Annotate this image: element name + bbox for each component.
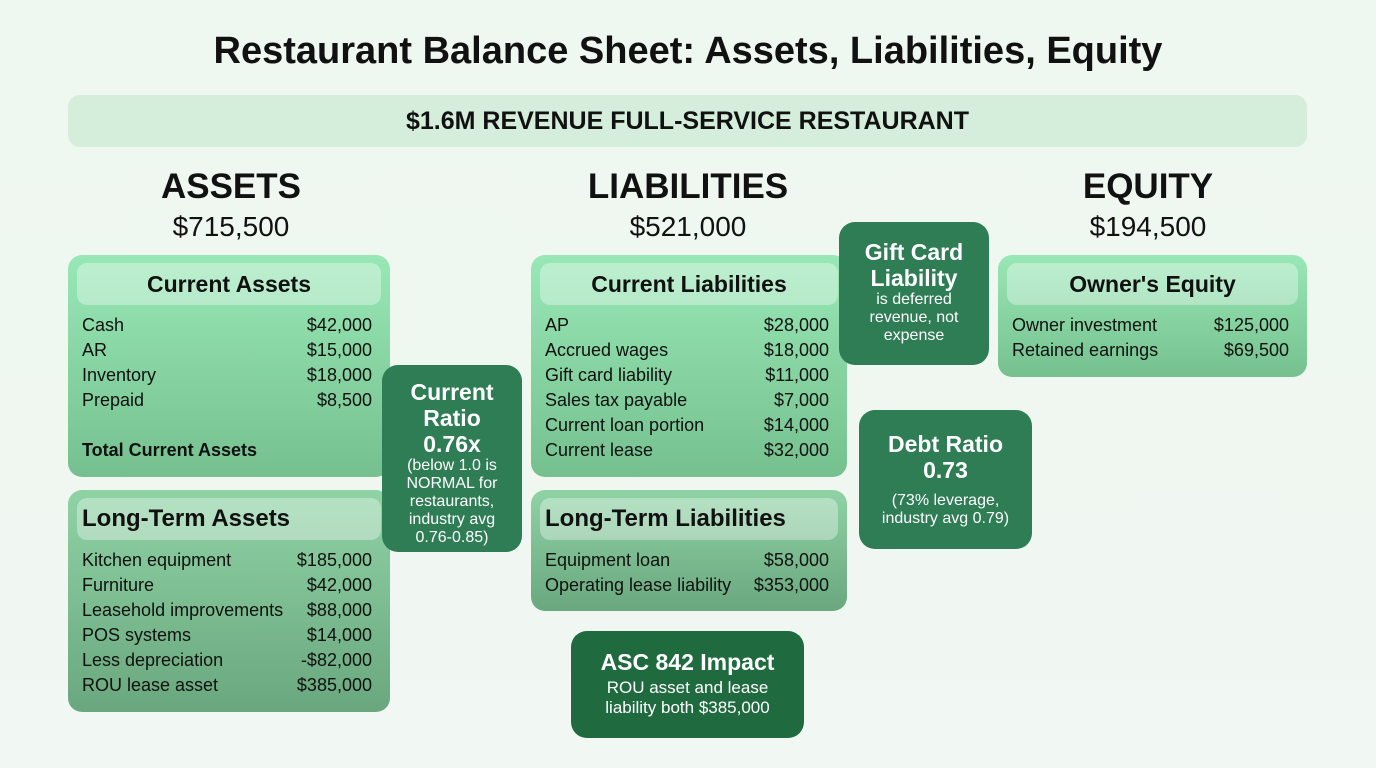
panel: long-term assets: $88,000 <box>307 600 372 620</box>
panel: long-term assets: $42,000 <box>307 575 372 595</box>
panel: owner's equity: Owner investment <box>1012 315 1157 335</box>
callout: ASC 842: ASC 842 Impact <box>601 649 774 675</box>
panel: current assets: Inventory <box>82 365 156 385</box>
panel: long-term assets: Long-Term Assets <box>82 505 290 532</box>
panel: current liabilities: Accrued wages <box>545 340 668 360</box>
panel: current liabilities: Sales tax payable <box>545 390 687 410</box>
panel: current liabilities: $32,000 <box>764 440 829 460</box>
panel: current assets: $8,500 <box>317 390 372 410</box>
panel: long-term assets: $185,000 <box>297 550 372 570</box>
callout: debt ratio <box>859 410 1032 549</box>
panel: current liabilities: Current loan portion <box>545 415 704 435</box>
callout: ASC 842: liability both $385,000 <box>605 698 770 717</box>
panel: current assets: Current Assets <box>147 271 311 297</box>
panel: long-term liabilities: Long-Term Liabilities <box>545 505 786 532</box>
callout: current ratio: (below 1.0 is <box>407 457 497 474</box>
callout: gift card liability: is deferred <box>876 291 952 308</box>
panel: long-term liabilities <box>531 490 847 611</box>
heading: liabilities: LIABILITIES <box>588 167 788 206</box>
panel: owner's equity: Retained earnings <box>1012 340 1158 360</box>
heading: equity: $194,500 <box>1090 211 1206 242</box>
panel: current assets: Prepaid <box>82 390 144 410</box>
callout: current ratio: restaurants, <box>410 493 494 510</box>
panel: current liabilities: Current Liabilities <box>591 271 787 297</box>
callout: gift card liability <box>839 222 989 365</box>
panel: long-term assets: $14,000 <box>307 625 372 645</box>
panel: owner's equity: $69,500 <box>1224 340 1289 360</box>
heading: assets: ASSETS <box>161 167 301 206</box>
title: Restaurant Balance Sheet: Assets, Liabilities, Equity <box>214 30 1162 72</box>
callout: current ratio <box>382 365 522 552</box>
callout: debt ratio: (73% leverage, <box>892 492 999 509</box>
heading: assets <box>161 167 301 242</box>
panel: current liabilities <box>531 255 847 477</box>
heading: liabilities: $521,000 <box>630 211 746 242</box>
panel: current assets: $15,000 <box>307 340 372 360</box>
panel: current liabilities: Gift card liability <box>545 365 672 385</box>
panel: long-term assets: ROU lease asset <box>82 675 218 695</box>
panel: current liabilities: $7,000 <box>774 390 829 410</box>
panel: long-term assets <box>68 490 390 712</box>
panel: current liabilities: $11,000 <box>765 365 829 385</box>
panel: current assets: Cash <box>82 315 124 335</box>
panel: long-term liabilities: $58,000 <box>764 550 829 570</box>
heading: equity <box>1083 167 1213 242</box>
callout: ASC 842: ROU asset and lease <box>607 678 768 697</box>
panel: long-term assets: -$82,000 <box>301 650 372 670</box>
panel: long-term liabilities: Equipment loan <box>545 550 670 570</box>
banner <box>68 95 1307 147</box>
callout: current ratio: Ratio <box>423 405 481 431</box>
panel: long-term assets: Furniture <box>82 575 154 595</box>
panel: current assets: $42,000 <box>307 315 372 335</box>
panel: current liabilities: $18,000 <box>764 340 829 360</box>
panel: current assets <box>68 255 390 477</box>
panel: long-term liabilities: $353,000 <box>754 575 829 595</box>
panel: current liabilities: AP <box>545 315 569 335</box>
panel: long-term assets: Kitchen equipment <box>82 550 231 570</box>
banner: $1.6M REVENUE FULL-SERVICE RESTAURANT <box>406 107 969 135</box>
panel: owner's equity: Owner's Equity <box>1069 271 1236 297</box>
panel: long-term assets: POS systems <box>82 625 191 645</box>
panel: current liabilities: $28,000 <box>764 315 829 335</box>
heading: assets: $715,500 <box>173 211 289 242</box>
callout: current ratio: industry avg <box>409 511 495 528</box>
callout: gift card liability: Liability <box>871 265 957 291</box>
panel: long-term assets: $385,000 <box>297 675 372 695</box>
callout: current ratio: NORMAL for <box>406 475 497 492</box>
heading: equity: EQUITY <box>1083 167 1213 206</box>
panel: owner's equity: $125,000 <box>1214 315 1289 335</box>
callout: gift card liability: Gift Card <box>865 239 963 265</box>
panel: long-term assets: Leasehold improvements <box>82 600 283 620</box>
callout: debt ratio: industry avg 0.79) <box>882 510 1009 527</box>
panel: owner's equity <box>998 255 1307 377</box>
panel: long-term assets: Less depreciation <box>82 650 223 670</box>
callout: gift card liability: expense <box>884 327 944 344</box>
panel: current liabilities: $14,000 <box>764 415 829 435</box>
callout: gift card liability: revenue, not <box>870 309 958 326</box>
panel: long-term liabilities: Operating lease liability <box>545 575 731 595</box>
callout: current ratio: 0.76x <box>423 431 481 457</box>
callout: current ratio: Current <box>410 379 494 405</box>
panel: current assets: Total Current Assets <box>82 440 257 460</box>
callout: debt ratio: 0.73 <box>923 457 968 483</box>
callout: ASC 842 <box>571 631 804 738</box>
panel: current liabilities: Current lease <box>545 440 653 460</box>
callout: debt ratio: Debt Ratio <box>888 431 1003 457</box>
panel: current assets: AR <box>82 340 107 360</box>
heading: liabilities <box>588 167 788 242</box>
panel: current assets: $18,000 <box>307 365 372 385</box>
callout: current ratio: 0.76-0.85) <box>416 529 488 546</box>
